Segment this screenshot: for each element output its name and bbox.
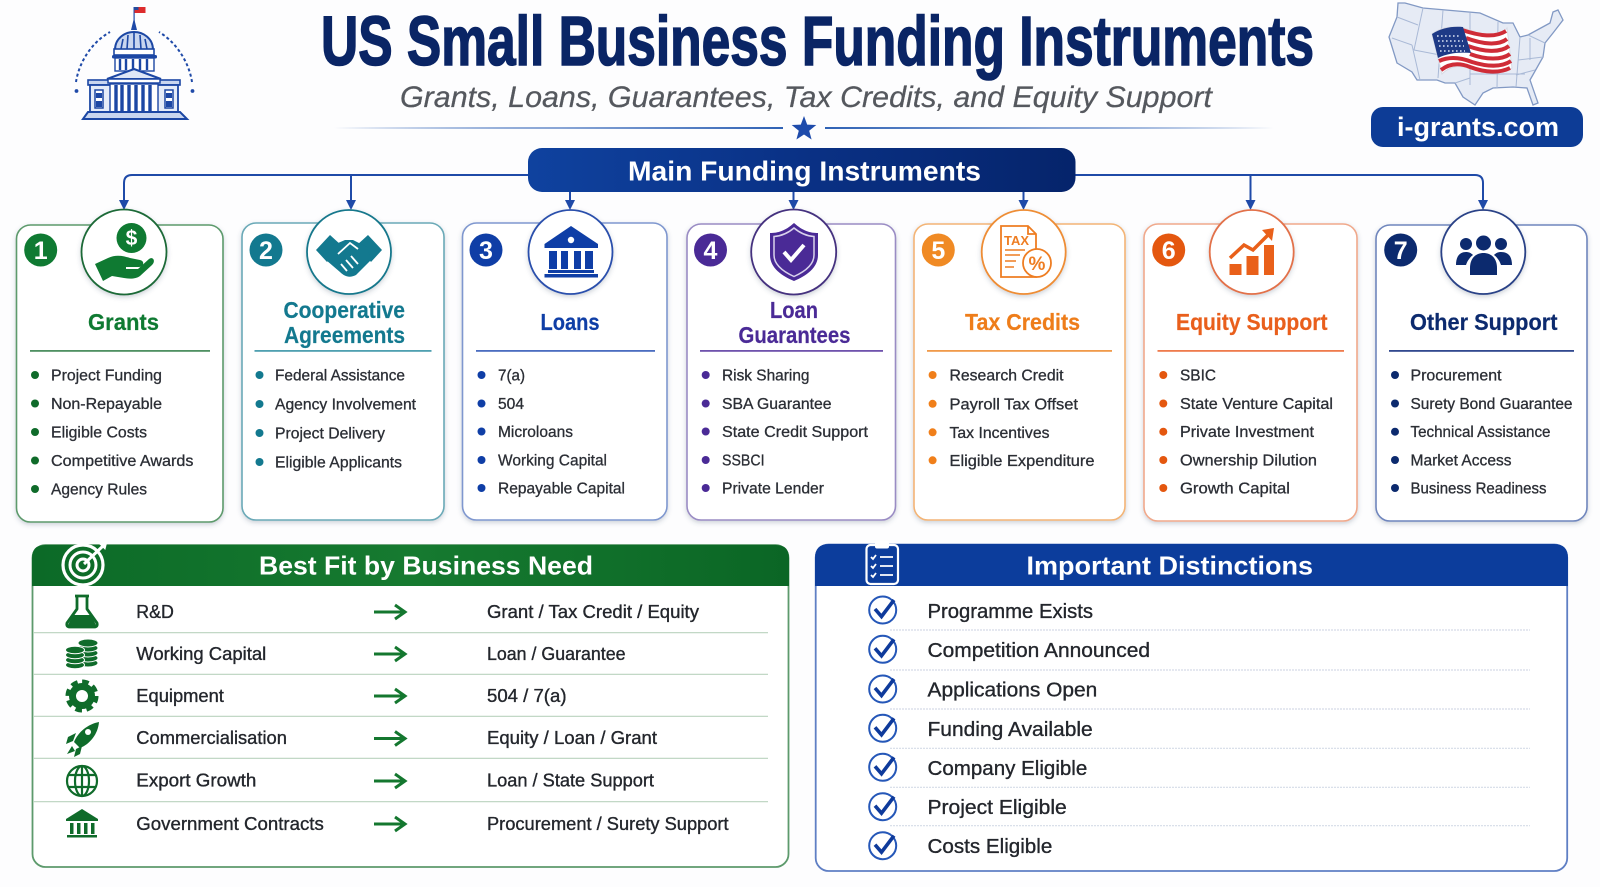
list: grants: Competitive Awards [51, 453, 194, 470]
list: equity support: SBIC [1180, 368, 1216, 384]
icon: target with arrow [63, 541, 107, 585]
list: equity support: State Venture Capital [1180, 396, 1333, 413]
number badge 2: 2 [259, 237, 273, 265]
number badge 1: 1 [34, 237, 48, 265]
icon: bank [528, 210, 612, 294]
subtitle: Grants, Loans, Guarantees, Tax Credits, and Equity Support [400, 81, 1214, 114]
icon: coins [66, 639, 98, 669]
row: government contracts: Procurement / Surety Support [487, 814, 729, 834]
heading: Guarantees [738, 322, 850, 348]
list: other support: Technical Assistance [1410, 424, 1551, 441]
number badge 6 [1152, 234, 1185, 266]
number badge 3 [470, 234, 502, 266]
list: loan guarantees [702, 368, 869, 498]
connectors: funding tree [119, 175, 1488, 210]
heading: Grants [88, 309, 159, 335]
list: loan guarantees: Private Lender [722, 480, 825, 498]
heading: Equity Support [1176, 309, 1328, 335]
number badge 1 [24, 234, 57, 266]
number badge 7 [1384, 234, 1417, 266]
icon: US map with flag [1389, 3, 1563, 105]
list: grants: Project Funding [51, 368, 162, 384]
list: loan guarantees: State Credit Support [722, 424, 869, 441]
list: equity support: Growth Capital [1180, 480, 1290, 498]
icon: growth chart [1210, 210, 1294, 294]
row: export growth [67, 766, 654, 796]
list: loan guarantees: SSBCI [722, 452, 764, 470]
list: grants: Eligible Costs [51, 424, 147, 442]
list: grants: Non-Repayable [51, 396, 162, 413]
number badge 2 [250, 234, 282, 266]
item: costs eligible: Costs Eligible [928, 835, 1052, 858]
list: tax credits: Tax Incentives [950, 425, 1050, 442]
number badge 6: 6 [1162, 237, 1176, 265]
item: applications open: Applications Open [928, 678, 1097, 702]
list: loan guarantees: SBA Guarantee [722, 396, 832, 413]
badge: i-grants.com: i-grants.com [1397, 112, 1559, 142]
heading [284, 297, 405, 348]
number badge 4 [694, 234, 727, 266]
list: loan guarantees: Risk Sharing [722, 368, 810, 384]
panel header [815, 544, 1568, 586]
heading: Loan [770, 297, 818, 323]
list: other support: Market Access [1410, 452, 1512, 470]
item: project eligible: Project Eligible [928, 796, 1067, 819]
icon: gear [68, 682, 96, 710]
heading: Tax Credits [965, 309, 1080, 335]
number badge 7: 7 [1394, 237, 1408, 265]
item: funding available [869, 715, 1093, 742]
list: tax credits [929, 368, 1095, 470]
panel: best fit by business need [32, 541, 789, 867]
list: equity support: Ownership Dilution [1180, 452, 1317, 470]
list: other support: Procurement [1410, 368, 1502, 384]
icon: hand with dollar coin [82, 210, 166, 294]
icon: shield with check [751, 210, 836, 294]
row: R&D [67, 596, 699, 627]
row: export growth: Loan / State Support [487, 770, 654, 790]
list: loans: 504 [498, 396, 524, 413]
row: equipment [68, 682, 566, 710]
panel header: Important Distinctions [1026, 550, 1313, 580]
panel: loan guarantees [687, 210, 896, 520]
row: commercialisation: Commercialisation [136, 728, 287, 748]
icon: capitol building [75, 7, 194, 119]
icon: rocket [66, 722, 99, 757]
icon: clipboard checklist [866, 540, 898, 584]
list: tax credits: Research Credit [950, 368, 1064, 384]
item: competition announced: Competition Announced [928, 639, 1150, 662]
item: competition announced [869, 636, 1150, 663]
number badge 4: 4 [704, 237, 718, 265]
section heading: main funding instruments: Main Funding Instruments [628, 156, 981, 186]
panel: cooperative agreements [242, 210, 444, 520]
heading: Loans [540, 309, 600, 335]
badge: i-grants.com [1371, 107, 1583, 147]
row: government contracts: Government Contracts [136, 814, 324, 834]
row: equipment: Equipment [136, 686, 224, 706]
number badge 5: 5 [931, 237, 945, 265]
icon: tax document: % [1029, 254, 1046, 275]
list: cooperative agreements [256, 368, 417, 472]
row: equipment: 504 / 7(a) [487, 686, 566, 706]
row: R&D: R&D [136, 602, 174, 622]
row: working capital: Loan / Guarantee [487, 644, 626, 664]
panel: tax credits [914, 210, 1125, 520]
panel header [32, 545, 789, 586]
row: commercialisation: Equity / Loan / Grant [487, 728, 657, 748]
row: working capital: Working Capital [136, 644, 266, 664]
list: cooperative agreements: Eligible Applicants [275, 454, 402, 472]
list: loans [478, 368, 625, 498]
icon: globe [67, 766, 97, 796]
list: loans: Repayable Capital [498, 480, 625, 498]
list: other support: Surety Bond Guarantee [1410, 396, 1573, 413]
panel: grants [16, 210, 223, 522]
icon: flask [67, 596, 97, 627]
row: government contracts [66, 809, 729, 838]
list: loans: Working Capital [498, 452, 607, 470]
heading [738, 297, 850, 348]
icon: tax document: TAX [1004, 233, 1029, 248]
icon: hand with dollar coin: $ [126, 227, 138, 250]
title divider with star [334, 116, 1274, 140]
list: equity support: Private Investment [1180, 424, 1315, 441]
list: grants: Agency Rules [51, 482, 147, 498]
item: project eligible [869, 793, 1067, 820]
row: working capital [66, 639, 626, 669]
number badge 3: 3 [479, 237, 493, 265]
list: other support: Business Readiness [1410, 480, 1546, 498]
item: programme exists: Programme Exists [928, 600, 1093, 623]
item: costs eligible [869, 832, 1052, 859]
icon: government building [66, 809, 98, 838]
item: company eligible: Company Eligible [928, 757, 1087, 780]
row: R&D: Grant / Tax Credit / Equity [487, 602, 699, 622]
heading: Agreements [284, 322, 405, 348]
section heading: main funding instruments [528, 148, 1076, 192]
list: cooperative agreements: Federal Assistance [275, 368, 405, 384]
row: commercialisation [66, 722, 657, 757]
item: applications open [869, 676, 1097, 702]
list: tax credits: Eligible Expenditure [950, 453, 1095, 470]
panel: other support [1376, 210, 1587, 521]
icon: tax document [982, 210, 1066, 294]
list: grants [31, 368, 194, 498]
list: loans: 7(a) [498, 368, 525, 384]
heading: Cooperative [284, 297, 405, 323]
list: loans: Microloans [498, 424, 573, 441]
heading: Other Support [1410, 309, 1558, 335]
list: cooperative agreements: Project Delivery [275, 426, 385, 442]
item: company eligible [869, 754, 1087, 781]
row: export growth: Export Growth [136, 770, 256, 790]
item: funding available: Funding Available [928, 718, 1093, 741]
panel: equity support [1144, 210, 1357, 521]
panel header: Best Fit by Business Need [259, 550, 593, 580]
list: equity support [1159, 368, 1333, 498]
panel: important distinctions [815, 540, 1568, 871]
panel: loans [462, 210, 667, 520]
icon: people [1441, 210, 1525, 294]
list: tax credits: Payroll Tax Offset [950, 396, 1079, 413]
list: other support [1391, 368, 1573, 498]
number badge 5 [922, 234, 955, 266]
item: programme exists [869, 596, 1093, 624]
list: cooperative agreements: Agency Involvement [275, 396, 417, 414]
icon: handshake [307, 210, 391, 294]
